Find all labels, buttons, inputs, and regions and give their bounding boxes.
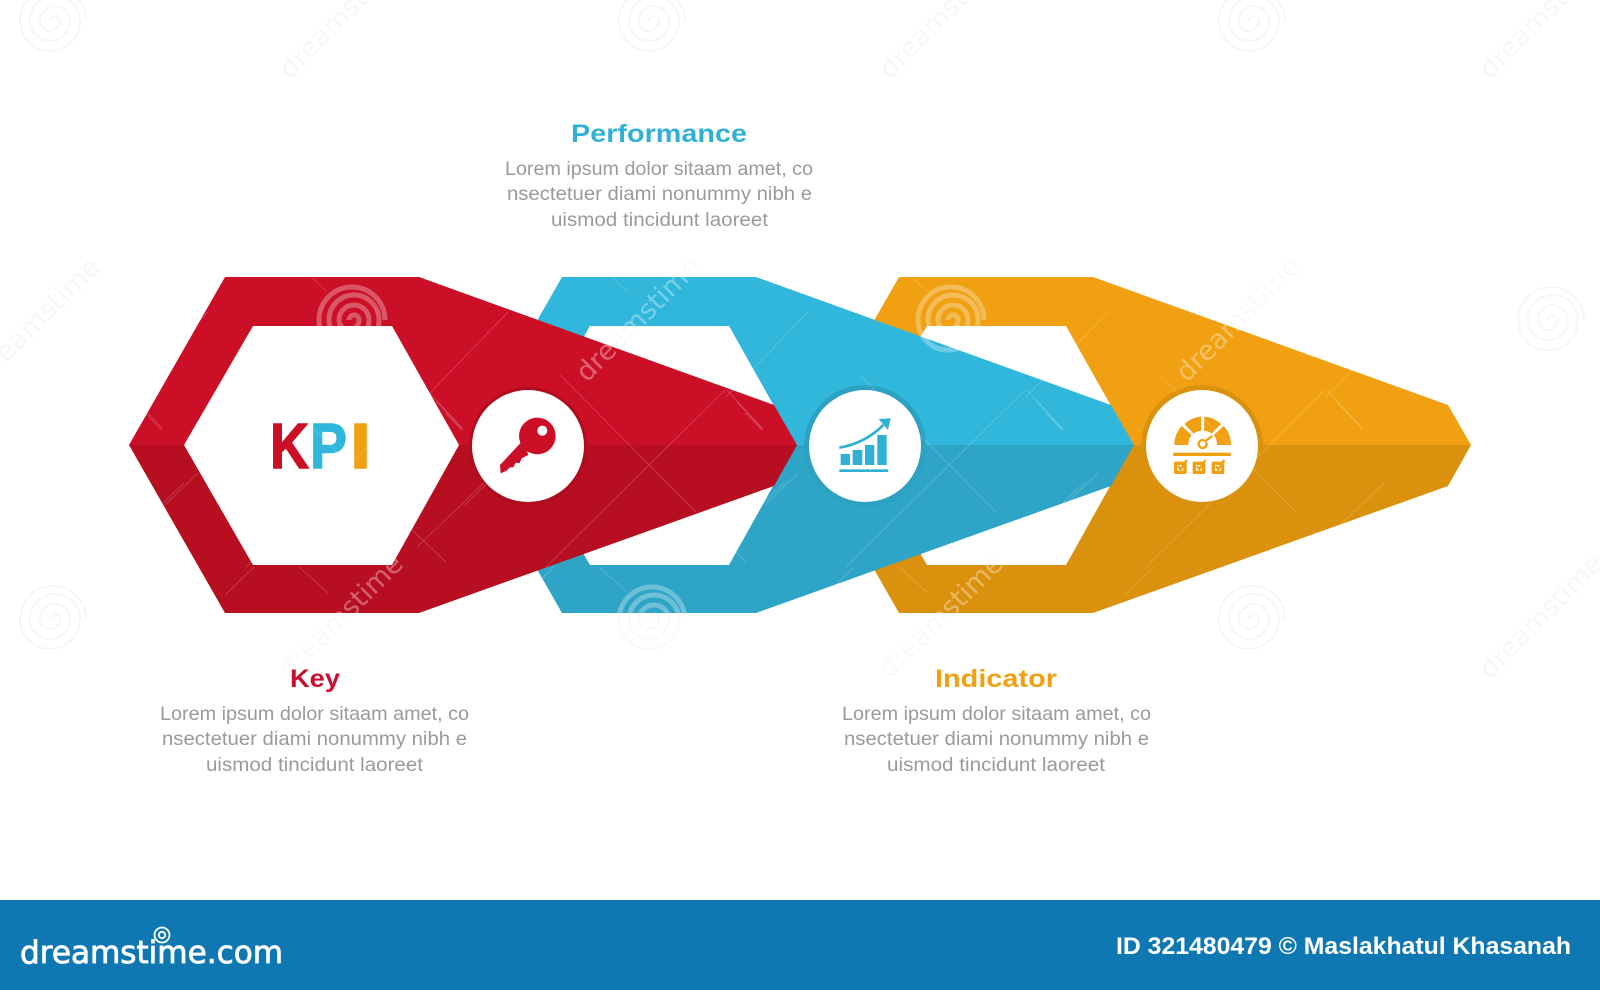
- text block: performance: [505, 120, 813, 231]
- footer logo: dreamstime.com: [20, 935, 283, 971]
- text block: performance: nsectetuer diami nonummy nibh e: [507, 184, 812, 205]
- watermark over shapes: dreamstime: [273, 548, 410, 685]
- watermark over shapes: dreamstime: [570, 251, 707, 388]
- panel: indicator arrow: [803, 277, 1471, 613]
- text block: performance: Performance: [571, 120, 747, 148]
- KPI label: I: [350, 410, 371, 482]
- footer credit: ID 321480479 © Maslakhatul Khasanah: [1116, 933, 1571, 960]
- circle badge: chart: [804, 385, 926, 507]
- circle badge: gauge: [1141, 385, 1263, 507]
- text block: indicator: nsectetuer diami nonummy nibh e: [844, 729, 1149, 750]
- text block: performance: uismod tincidunt laoreet: [551, 210, 769, 231]
- circle badge: key: [469, 387, 587, 505]
- faint watermark on white background: [0, 0, 1600, 685]
- KPI label: [270, 410, 371, 482]
- faint watermark on white background: dreamstime: [873, 548, 1010, 685]
- text block: indicator: Lorem ipsum dolor sitaam amet, co: [842, 704, 1151, 725]
- text block: indicator: Indicator: [935, 665, 1057, 693]
- faint watermark on white background: dreamstime: [570, 251, 707, 388]
- text block: key: [160, 665, 469, 776]
- icon: growth chart: [839, 418, 891, 472]
- text block: key: Key: [290, 665, 340, 693]
- watermark over shapes: [0, 251, 1600, 685]
- text block: indicator: uismod tincidunt laoreet: [887, 755, 1106, 776]
- footer bar: [0, 900, 1600, 990]
- icon: gauge and checklists: [1173, 417, 1231, 474]
- KPI label: P: [310, 410, 347, 482]
- panel: key arrow: [129, 277, 797, 613]
- panel: performance arrow: [466, 277, 1134, 613]
- icon: key: [500, 418, 556, 473]
- text block: indicator: [842, 665, 1151, 776]
- watermark over shapes: dreamstime: [873, 548, 1010, 685]
- text block: key: nsectetuer diami nonummy nibh e: [162, 729, 467, 750]
- watermark over shapes: dreamstime: [1170, 251, 1307, 388]
- faint watermark on white background: dreamstime: [273, 548, 410, 685]
- text block: key: uismod tincidunt laoreet: [206, 755, 424, 776]
- faint watermark on white background: dreamstime: [1170, 251, 1307, 388]
- text block: key: Lorem ipsum dolor sitaam amet, co: [160, 704, 469, 725]
- KPI label: K: [270, 410, 309, 482]
- text block: performance: Lorem ipsum dolor sitaam amet, co: [505, 159, 813, 180]
